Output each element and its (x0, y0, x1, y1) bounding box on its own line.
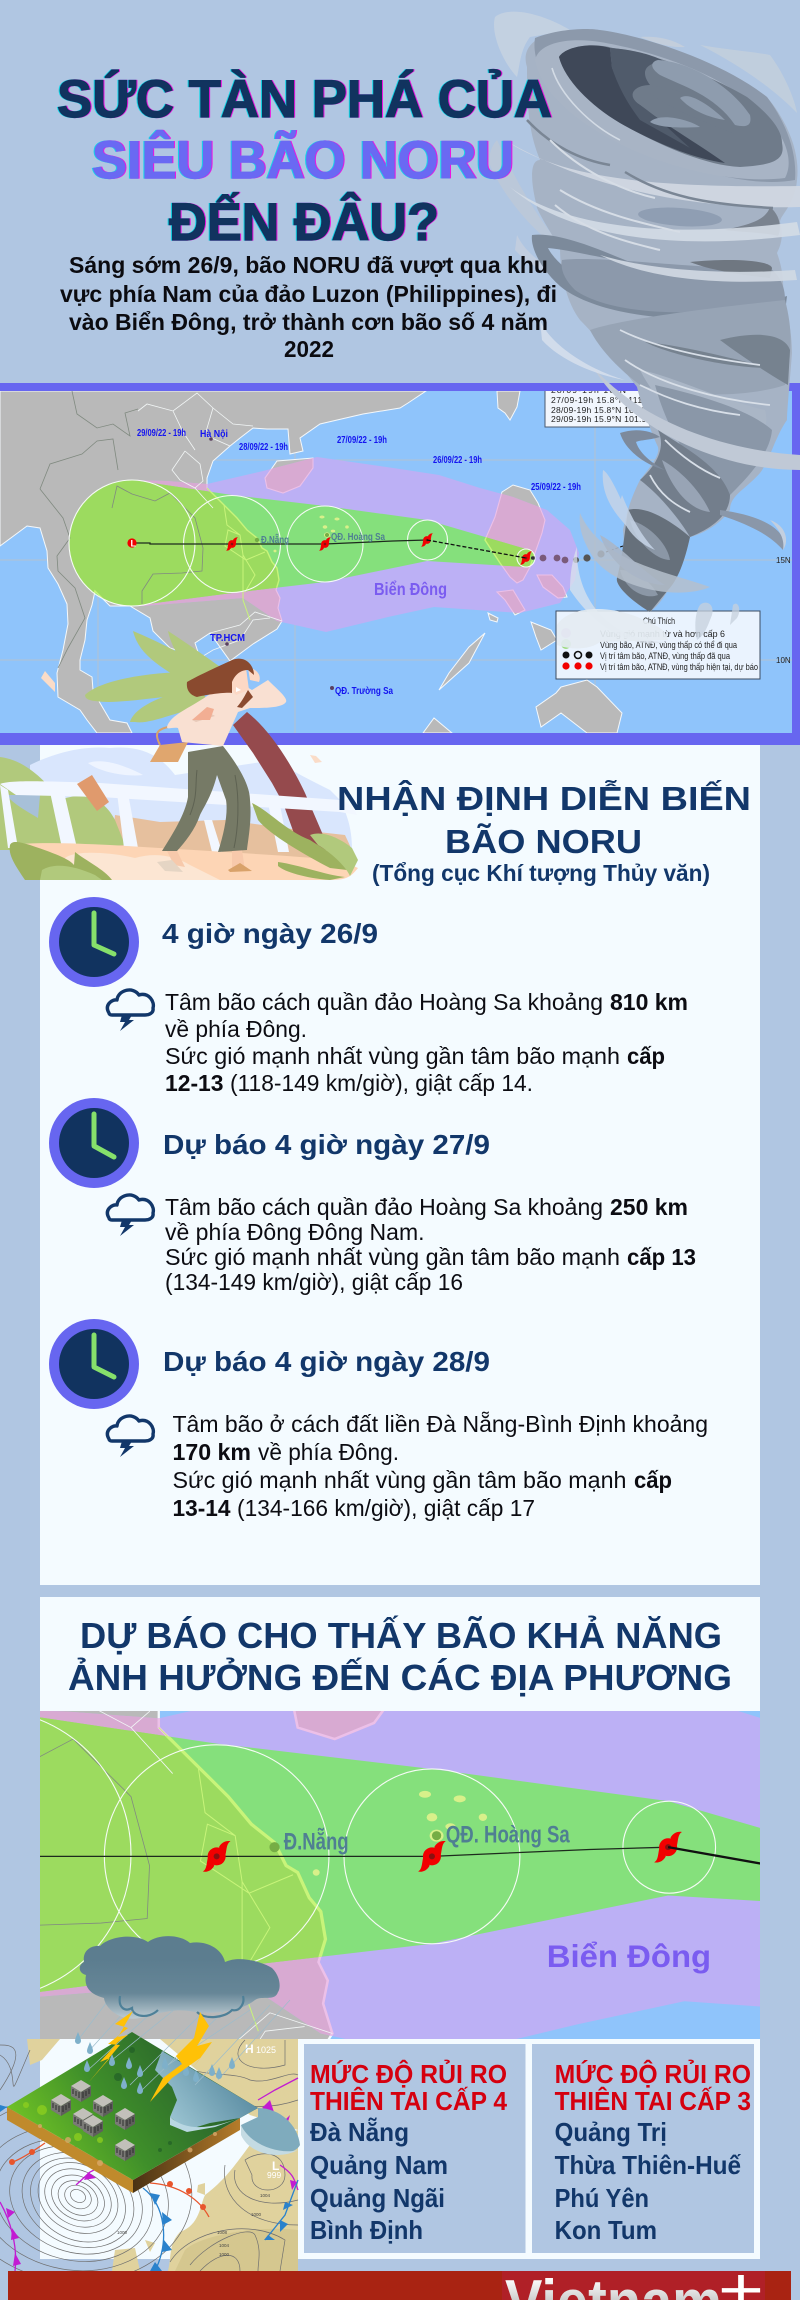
risk box: level 3: Quảng Trị (555, 2117, 667, 2147)
heading: storm assessment (337, 780, 751, 886)
item text: 170 km (172, 1439, 251, 1465)
item text (165, 989, 688, 1096)
illustration: weather chart: 1004 (260, 2193, 271, 2198)
map: typhoon forecast track: TP.HCM (210, 632, 245, 644)
icon: clock (49, 1098, 139, 1188)
item heading: Dự báo 4 giờ ngày 27/9 (163, 1129, 490, 1160)
item text: cấp (634, 1467, 672, 1493)
risk box: level 3: Thừa Thiên-Huế (555, 2150, 741, 2180)
panel: forecast heading background (40, 1597, 760, 1711)
illustration: weather chart: 1000 (117, 2230, 128, 2235)
map: typhoon forecast track: 29/09-19h 15.9°N 101.9° (551, 414, 650, 424)
illustration: weather chart: 1000 (251, 2212, 262, 2217)
illustration: weather chart: 1008 (217, 2230, 228, 2235)
risk box: level 4: Quảng Ngãi (310, 2183, 445, 2213)
timeline item: 26/9 (49, 897, 688, 1096)
item text: 13-14 (172, 1495, 231, 1521)
item heading: Dự báo 4 giờ ngày 28/9 (163, 1346, 490, 1377)
risk box: level 4 (304, 2044, 526, 2253)
subtitle: 2022 (284, 336, 334, 362)
heading: storm assessment: (Tổng cục Khí tượng Thủy văn) (372, 860, 710, 886)
map: typhoon forecast track: 27/09-19h 15.8°N 111. (551, 395, 645, 405)
item text: Sức gió mạnh nhất vùng gần tâm bão mạnh (165, 1043, 620, 1069)
illustration: weather chart: 999 (267, 2170, 281, 2180)
map: typhoon forecast track: Chú Thích (643, 616, 675, 627)
risk box: level 3 (532, 2044, 754, 2253)
item heading: 4 giờ ngày 26/9 (162, 918, 378, 949)
heading: forecast: DỰ BÁO CHO THẤY BÃO KHẢ NĂNG (80, 1614, 722, 1656)
map: zoomed affected area: QĐ. Hoàng Sa (446, 1822, 570, 1849)
risk box: level 3: Kon Tum (555, 2215, 657, 2245)
timeline item: 28/9 (49, 1319, 708, 1521)
illustration: weather chart: 1025 (256, 2045, 276, 2055)
item text: về phía Đông. (258, 1439, 399, 1465)
title (57, 69, 552, 252)
item text: Sức gió mạnh nhất vùng gần tâm bão mạnh (165, 1244, 620, 1270)
risk box: level 3: THIÊN TAI CẤP 3 (555, 2086, 751, 2116)
map: typhoon forecast track: QĐ. Trường Sa (335, 685, 393, 697)
subtitle: Sáng sớm 26/9, bão NORU đã vượt qua khu (69, 252, 548, 278)
risk box: level 4: Đà Nẵng (310, 2117, 409, 2147)
illustration: tornado (489, 12, 800, 648)
illustration: weather chart: L (272, 2159, 279, 2173)
footer bar (8, 2256, 791, 2300)
illustration: weather chart: 1004 (219, 2243, 230, 2248)
map: typhoon forecast track (0, 385, 792, 733)
risk box: level 4: Bình Định (310, 2215, 423, 2245)
item text: Tâm bão cách quần đảo Hoàng Sa khoảng (165, 1194, 603, 1220)
subtitle: vào Biển Đông, trở thành cơn bão số 4 năm (69, 309, 548, 335)
item text: Sức gió mạnh nhất vùng gần tâm bão mạnh (172, 1467, 626, 1493)
illustration: weather chart: 1000 (219, 2252, 230, 2257)
map: zoomed affected area (40, 1711, 760, 2039)
map: typhoon forecast track: Vùng gió mạnh từ và hơn cấp 6 (600, 629, 725, 640)
subtitle: vực phía Nam của đảo Luzon (Philippines), đi (60, 281, 557, 307)
icon: clock (49, 1319, 139, 1409)
panel: risk levels background (298, 2039, 760, 2259)
logo: Vietnam+ (505, 2256, 764, 2300)
item text: Tâm bão cách quần đảo Hoàng Sa khoảng (165, 989, 603, 1015)
heading: storm assessment: BÃO NORU (445, 823, 642, 861)
item text: Tâm bão ở cách đất liền Đà Nẵng-Bình Định khoảng (172, 1410, 708, 1437)
illustration: weather chart: H (245, 2042, 254, 2056)
icon: storm cloud (107, 1195, 153, 1236)
purple frame band around typhoon map (0, 383, 800, 745)
map: typhoon forecast track: Vị trí tâm bão, ATNĐ, vùng thấp đã qua (600, 651, 731, 662)
map: typhoon forecast track: L (130, 538, 136, 548)
icon: clock (49, 897, 139, 987)
item text: (134-166 km/giờ), giật cấp 17 (237, 1495, 535, 1521)
illustration: flood platform with storm cloud (7, 1936, 300, 2193)
map: zoomed affected area: Biển Đông (547, 1939, 711, 1974)
subtitle (60, 252, 557, 362)
risk box: level 4: THIÊN TAI CẤP 4 (310, 2086, 508, 2116)
item text: (134-149 km/giờ), giật cấp 16 (165, 1269, 463, 1295)
map: typhoon forecast track: 29/09/22 - 19h (137, 427, 186, 439)
item text: (118-149 km/giờ), giật cấp 14. (230, 1070, 533, 1096)
map: typhoon forecast track: 28/09/22 - 19h (239, 441, 288, 453)
map: typhoon forecast track: Hà Nội (200, 428, 228, 440)
item text (172, 1410, 708, 1521)
icon: storm cloud (107, 990, 153, 1031)
map: typhoon forecast track: 28/09-19h 16°N (551, 385, 626, 395)
map: typhoon forecast track: 25/09/22 - 19h (531, 481, 581, 493)
map: typhoon forecast track: Biển Đông (374, 579, 447, 599)
risk box: level 4: Quảng Nam (310, 2150, 448, 2180)
map: typhoon forecast track: Đ.Nẵng (261, 533, 289, 546)
risk box: level 3: Phú Yên (555, 2183, 649, 2213)
title: SIÊU BÃO NORU (92, 129, 514, 190)
title: SỨC TÀN PHÁ CỦA (57, 69, 552, 129)
title: ĐẾN ĐÂU? (169, 191, 439, 252)
illustration: weather chart (0, 2039, 298, 2292)
map: typhoon forecast track: Vị trí tâm bão, ATNĐ, vùng thấp hiện tại, dự báo (600, 662, 758, 673)
map: typhoon forecast track: 27/09/22 - 19h (337, 434, 387, 446)
map: typhoon forecast track: QĐ. Hoàng Sa (331, 531, 385, 543)
heading: forecast (68, 1614, 732, 1698)
map: zoomed affected area: Đ.Nẵng (284, 1828, 349, 1855)
map: typhoon forecast track: 10N (776, 656, 791, 665)
item text: về phía Đông. (165, 1016, 307, 1042)
item text (165, 1194, 696, 1295)
map: typhoon forecast track: 26/09/22 - 19h (433, 454, 482, 466)
risk box: level 4: MỨC ĐỘ RỦI RO (310, 2058, 507, 2089)
illustration: woman in the wind (0, 631, 358, 880)
item text: cấp 13 (627, 1244, 696, 1270)
map: typhoon forecast track: Vùng bão, ATNĐ, vùng thấp có thể đi qua (600, 640, 738, 651)
icon: storm cloud (107, 1416, 153, 1457)
item text: cấp (627, 1043, 665, 1069)
item text: 250 km (610, 1194, 688, 1220)
map: typhoon forecast track: 15N (776, 556, 791, 565)
panel: storm assessment (40, 745, 760, 1585)
map: typhoon forecast track: 28/09-19h 15.8°N 106.9° (551, 405, 650, 415)
item text: 12-13 (165, 1070, 224, 1096)
risk box: level 3: MỨC ĐỘ RỦI RO (555, 2058, 751, 2089)
timeline item: 27/9 (49, 1098, 696, 1295)
item text: về phía Đông Đông Nam. (165, 1219, 424, 1245)
heading: storm assessment: NHẬN ĐỊNH DIỄN BIẾN (337, 780, 751, 818)
item text: 810 km (610, 989, 688, 1015)
heading: forecast: ẢNH HƯỞNG ĐẾN CÁC ĐỊA PHƯƠNG (68, 1656, 732, 1698)
